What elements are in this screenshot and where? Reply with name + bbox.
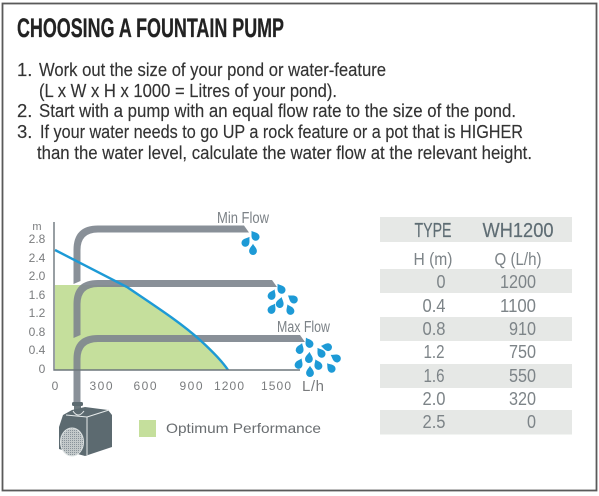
table H values: 0.8 [422, 318, 446, 339]
y axis labels: 2.4 [29, 251, 46, 265]
y axis labels [29, 221, 46, 376]
label: max flow: Max Flow [277, 319, 331, 336]
table header: TYPE [414, 220, 452, 242]
instructions text: Start with a pump with an equal flow rate to the size of the pond. [39, 100, 516, 121]
instructions text [17, 59, 532, 163]
table Q values: 1200 [500, 271, 536, 292]
table H values: 0 [436, 271, 446, 292]
drops: mid flow [266, 282, 299, 316]
table header: WH1200 [482, 220, 554, 242]
instructions text: (L x W x H x 1000 = Litres of your pond). [39, 80, 337, 101]
x axis labels: 1200 [214, 379, 244, 393]
x axis labels [52, 378, 324, 395]
y axis labels: 2.0 [29, 269, 46, 283]
flow curve [55, 250, 228, 370]
icon: fountain pump [59, 402, 112, 456]
instructions text: If your water needs to go UP a rock feature or a pot that is HIGHER [40, 121, 523, 142]
pipe: mid flow [74, 280, 277, 338]
drops: min flow [240, 229, 261, 255]
pipe: max flow [74, 335, 305, 404]
instructions text: than the water level, calculate the water flow at the relevant height. [37, 142, 532, 163]
y axis labels: 2.8 [29, 232, 46, 246]
instructions text: Work out the size of your pond or water-feature [39, 59, 386, 80]
table H values: 0.4 [422, 295, 446, 316]
y axis labels: 0.8 [29, 325, 46, 339]
table H values: 2.5 [422, 411, 446, 432]
table column labels: H (m) [414, 249, 452, 269]
y axis labels: 1.6 [29, 288, 46, 302]
table H values [422, 271, 446, 432]
x axis labels: 900 [180, 379, 203, 393]
y axis labels: m [32, 221, 42, 233]
table header [414, 220, 554, 242]
x axis labels: 600 [134, 379, 157, 393]
instructions text: 3. [17, 121, 32, 142]
table column labels [414, 249, 542, 269]
table Q values: 1100 [500, 295, 536, 316]
pipe: min flow [74, 226, 249, 284]
table column labels: Q (L/h) [494, 249, 542, 269]
y axis labels: 0 [39, 362, 46, 376]
x axis labels: 0 [52, 379, 59, 393]
y axis labels: 0.4 [29, 343, 46, 357]
table H values: 1.6 [424, 365, 444, 386]
drops: max flow [293, 336, 342, 377]
instructions text: 1. [17, 59, 32, 80]
table Q values [500, 271, 536, 432]
table: pump specifications [380, 217, 572, 434]
x axis labels: 1500 [261, 379, 291, 393]
table row shading [380, 217, 572, 434]
table Q values: 910 [509, 318, 536, 339]
table Q values: 0 [527, 411, 536, 432]
table Q values: 550 [509, 365, 536, 386]
title: CHOOSING A FOUNTAIN PUMP [17, 13, 284, 43]
x axis labels: L/h [302, 378, 324, 395]
table Q values: 750 [509, 341, 536, 362]
table H values: 1.2 [424, 341, 444, 362]
x axis labels: 300 [90, 379, 113, 393]
legend: Optimum Performance [166, 420, 321, 436]
table H values: 2.0 [422, 388, 446, 409]
instructions text: 2. [17, 100, 32, 121]
optimum performance area [55, 285, 229, 370]
label: min flow: Min Flow [217, 210, 270, 227]
axes [54, 222, 300, 370]
y axis labels: 1.2 [29, 306, 46, 320]
chart: pump performance [29, 210, 342, 404]
table Q values: 320 [509, 388, 536, 409]
